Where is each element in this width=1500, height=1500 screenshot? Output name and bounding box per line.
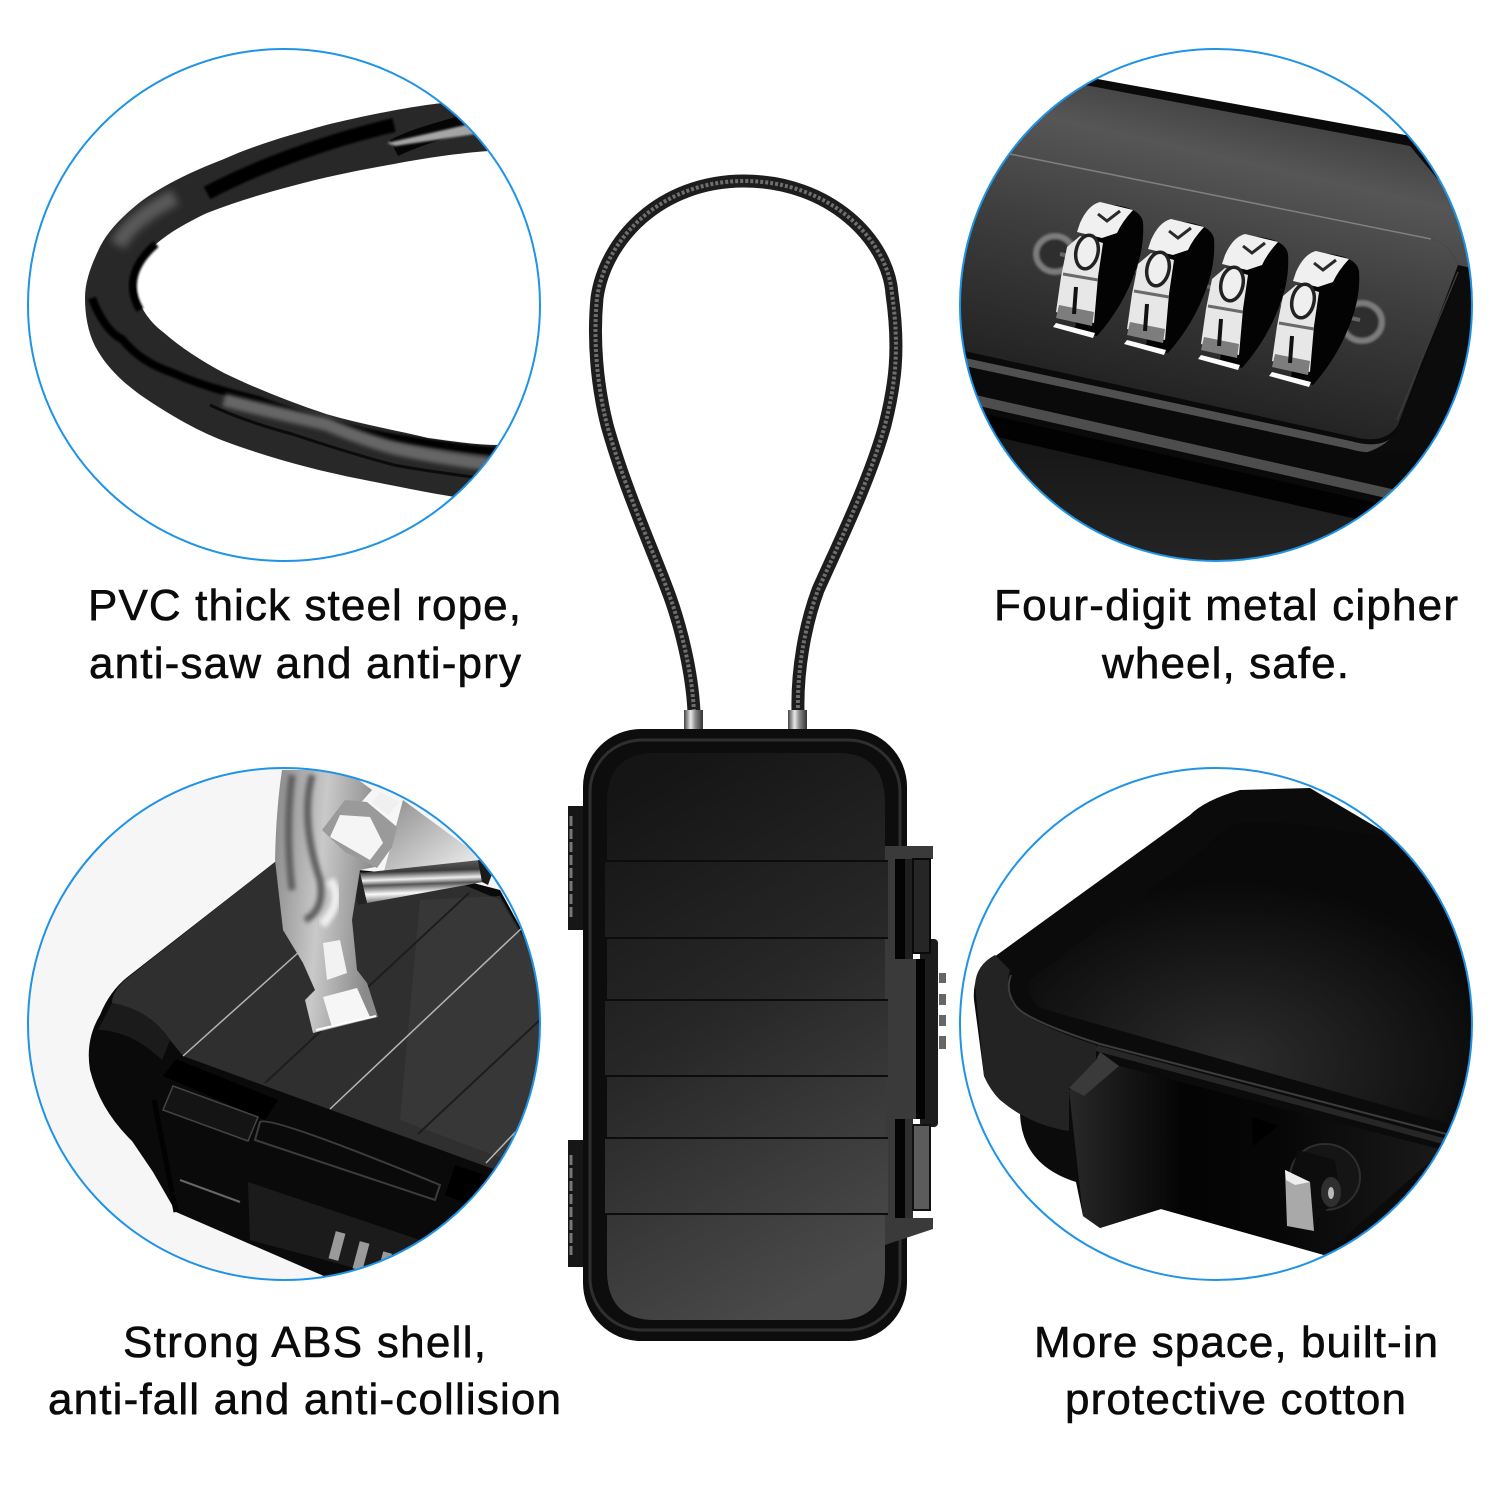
panel: PVC steel rope	[28, 49, 540, 561]
circle outline	[960, 768, 1472, 1280]
key cylinder	[1285, 1144, 1360, 1231]
lid panel	[605, 753, 888, 1320]
circle photo: shell	[28, 768, 560, 1290]
circle photo: open box	[974, 788, 1471, 1255]
caption: PVC steel rope: PVC thick steel rope,	[88, 581, 521, 630]
caption: PVC steel rope	[88, 581, 521, 688]
right dial housing	[920, 939, 946, 1127]
caption: cipher wheel: wheel, safe.	[1101, 639, 1349, 688]
cable ferrules	[684, 710, 807, 731]
hammer shading	[288, 775, 321, 920]
center product: cable lock box	[568, 181, 946, 1341]
caption: inner space: protective cotton	[1065, 1375, 1406, 1424]
circle photo: cipher wheels	[961, 79, 1471, 560]
box body	[583, 729, 907, 1341]
caption: PVC steel rope: anti-saw and anti-pry	[89, 639, 521, 688]
steel cable loop	[595, 181, 896, 712]
lid ridge lines	[605, 861, 888, 1214]
caption: ABS shell	[48, 1318, 561, 1424]
circle outline	[28, 768, 540, 1280]
right latches	[885, 846, 933, 1245]
panel: inner cotton space	[960, 768, 1500, 1280]
hammer	[275, 770, 495, 1033]
caption: inner space	[1034, 1318, 1438, 1424]
caption: cipher wheel	[994, 581, 1458, 688]
panel: four digit cipher wheel	[950, 49, 1480, 570]
circle photo: cable close-up	[85, 103, 498, 496]
circle outline	[960, 49, 1472, 561]
circle outline	[28, 49, 540, 561]
caption: cipher wheel: Four-digit metal cipher	[994, 581, 1458, 630]
caption: inner space: More space, built-in	[1034, 1318, 1438, 1367]
panel: ABS shell with hammer	[28, 768, 560, 1290]
cipher wheels	[1053, 202, 1359, 387]
cipher axle ends	[1036, 236, 1382, 341]
caption: ABS shell: Strong ABS shell,	[123, 1318, 486, 1367]
caption: ABS shell: anti-fall and anti-collision	[48, 1375, 561, 1424]
small cipher wheels	[328, 1231, 392, 1269]
left hinges	[568, 806, 592, 1267]
